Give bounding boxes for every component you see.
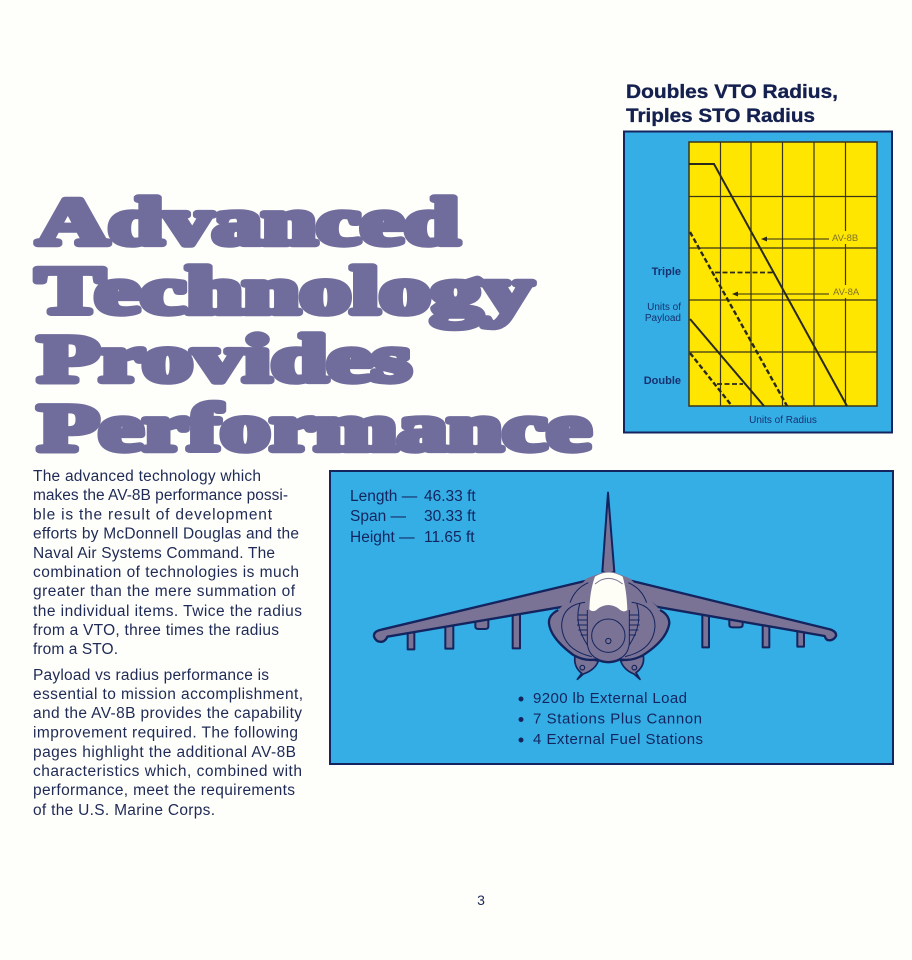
AV-8A dashed curves <box>690 232 787 406</box>
aircraft front view <box>374 493 836 679</box>
body text: first paragraph: from a STO. <box>33 641 118 658</box>
body text: second paragraph: of the U.S. Marine Corps. <box>33 802 215 819</box>
body text: second paragraph: essential to mission accomplishment, <box>33 686 303 703</box>
capability bullets <box>518 690 703 748</box>
dimension list: Span — <box>350 508 407 525</box>
page number: 3 <box>477 892 485 908</box>
fuselage body <box>549 570 669 662</box>
dimension list: Length — <box>350 488 418 505</box>
dimension list: 46.33 ft <box>424 488 476 505</box>
body text: second paragraph: Payload vs radius performance is <box>33 667 269 684</box>
chart heading: Doubles VTO Radius, <box>626 81 838 103</box>
body text: first paragraph: makes the AV-8B performance possi- <box>33 487 288 504</box>
capability bullets: 9200 lb External Load <box>533 690 687 707</box>
body text: first paragraph: efforts by McDonnell Douglas and the <box>33 526 299 542</box>
body text: first paragraph: combination of technologies is much <box>33 564 299 581</box>
tail fin <box>602 493 614 572</box>
wings <box>374 579 593 642</box>
title: Provides <box>38 322 411 396</box>
title: Technology <box>36 254 533 328</box>
body text: first paragraph: the individual items. Twice the radius <box>33 603 302 620</box>
body text: first paragraph: Naval Air Systems Command. The <box>33 545 275 562</box>
body text: second paragraph <box>33 667 303 819</box>
body text: second paragraph: performance, meet the requirements <box>33 782 295 799</box>
label: AV-8B with arrow: AV-8B <box>832 233 858 244</box>
title: Performance <box>38 391 591 465</box>
label: AV-8A with arrow <box>732 285 865 298</box>
dimension list <box>350 488 476 546</box>
body text: second paragraph: improvement required. The following <box>33 724 298 742</box>
capability bullets: 4 External Fuel Stations <box>533 731 703 748</box>
body text: first paragraph: The advanced technology which <box>33 468 261 485</box>
label: AV-8A with arrow: AV-8A <box>833 287 860 298</box>
panel: payload vs radius chart <box>624 132 892 432</box>
y axis labels: Triple <box>652 266 681 278</box>
chart heading <box>626 81 838 127</box>
canopy <box>589 572 627 611</box>
dimension list: Height — <box>350 529 415 546</box>
body text: first paragraph: greater than the mere summation of <box>33 583 296 600</box>
dimension list: 30.33 ft <box>424 508 476 525</box>
panel: aircraft specifications <box>330 471 893 764</box>
y axis labels: Double <box>644 375 681 387</box>
fuselage, intakes and pods <box>549 570 669 679</box>
y axis labels: Payload <box>645 313 681 324</box>
capability bullets: 7 Stations Plus Cannon <box>533 710 702 728</box>
underwing pods <box>575 656 598 679</box>
y axis labels: Units of <box>647 302 681 313</box>
intake rings and hatching <box>562 583 655 659</box>
label: AV-8B with arrow <box>761 231 865 244</box>
chart heading: Triples STO Radius <box>626 105 815 127</box>
body text: second paragraph: pages highlight the additional AV-8B <box>33 744 296 761</box>
body text: first paragraph <box>33 468 302 658</box>
dimension list: 11.65 ft <box>424 529 475 546</box>
chart plot area <box>689 142 877 406</box>
body text: second paragraph: characteristics which, combined with <box>33 763 302 780</box>
stores pylons <box>408 614 804 649</box>
AV-8B solid curves <box>689 164 847 406</box>
x axis label: Units of Radius <box>749 415 817 426</box>
title <box>36 185 591 465</box>
title: Advanced <box>37 185 459 259</box>
body text: first paragraph: from a VTO, three times the radius <box>33 622 279 639</box>
body text: first paragraph: ble is the result of development <box>33 506 273 524</box>
y axis labels <box>644 266 681 387</box>
body text: second paragraph: and the AV-8B provides the capability <box>33 705 302 722</box>
